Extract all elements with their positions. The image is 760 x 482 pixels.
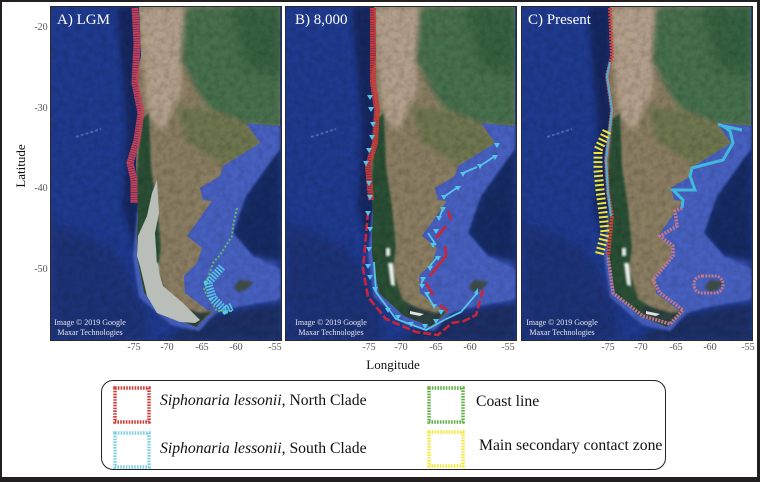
x axis tick labels: -70: [634, 342, 648, 353]
north clade range: [130, 8, 141, 203]
north clade strip: [368, 8, 377, 200]
y axis tick labels: [34, 22, 48, 275]
x axis tick labels: -55: [268, 342, 282, 353]
x axis tick labels: -60: [229, 342, 243, 353]
image credit: [526, 318, 598, 337]
mixed clades southern coast: [608, 208, 683, 324]
legend label: south clade: Siphonaria lessonii, South Clade: [160, 440, 367, 457]
panel title: C) Present: [528, 12, 591, 28]
y axis title: Latitude: Latitude: [13, 144, 28, 188]
x axis tick labels: -75: [362, 342, 376, 353]
x axis tick labels: -70: [394, 342, 408, 353]
south clade arrows: [363, 95, 500, 329]
legend swatch: contact zone: [427, 430, 465, 468]
image credit: Maxar Technologies: [57, 328, 123, 336]
panel: C) Present: [521, 6, 753, 341]
y axis tick labels: -20: [34, 22, 48, 33]
image credit: Maxar Technologies: [298, 328, 364, 336]
y axis tick labels: -50: [34, 264, 48, 275]
south clade atlantic coast: [673, 124, 742, 208]
x axis tick labels: -55: [741, 342, 755, 353]
image credit: [295, 318, 367, 337]
image credit: Image © 2019 Google: [54, 318, 126, 327]
image credit: [54, 318, 126, 337]
x axis tick labels: -60: [703, 342, 717, 353]
x axis tick labels: -65: [669, 342, 683, 353]
x axis tick labels: -70: [160, 342, 174, 353]
x axis tick labels: -75: [601, 342, 615, 353]
x axis tick labels: -75: [127, 342, 141, 353]
panel: A) LGM: [50, 6, 282, 341]
legend label: contact zone: Main secondary contact zone: [479, 437, 662, 454]
panel: B) 8,000: [285, 6, 517, 341]
south clade range: [208, 267, 233, 310]
legend swatch: north clade: [113, 386, 151, 424]
south clade path: [374, 262, 478, 330]
legend swatch: south clade: [113, 431, 151, 469]
north clade atlantic arcs: [426, 211, 451, 311]
y axis tick labels: -40: [34, 183, 48, 194]
panel title: A) LGM: [57, 12, 110, 28]
x axis tick labels: -65: [429, 342, 443, 353]
south clade atlantic arcs: [421, 156, 495, 305]
x axis tick labels: -60: [463, 342, 477, 353]
image credit: Image © 2019 Google: [295, 318, 367, 327]
north clade coast: [606, 8, 612, 256]
image credit: Image © 2019 Google: [526, 318, 598, 327]
x axis tick labels: [127, 342, 755, 353]
x axis title: Longitude: Longitude: [366, 357, 420, 372]
ice sheet: [137, 180, 200, 323]
legend label: coast line: Coast line: [476, 393, 539, 410]
south clade coast: [606, 62, 612, 216]
panel title: B) 8,000: [295, 12, 348, 28]
x axis tick labels: -55: [501, 342, 515, 353]
x axis tick labels: -65: [195, 342, 209, 353]
north clade dashed expansion: [363, 212, 483, 335]
y axis tick labels: -30: [34, 103, 48, 114]
legend swatch: coast line: [427, 386, 465, 424]
legend label: north clade: Siphonaria lessonii, North Clade: [160, 392, 367, 409]
falkland ring: [694, 276, 723, 293]
image credit: Maxar Technologies: [529, 328, 595, 336]
coast line: [204, 208, 237, 311]
contact zone: [598, 131, 607, 256]
legend: [101, 380, 666, 470]
